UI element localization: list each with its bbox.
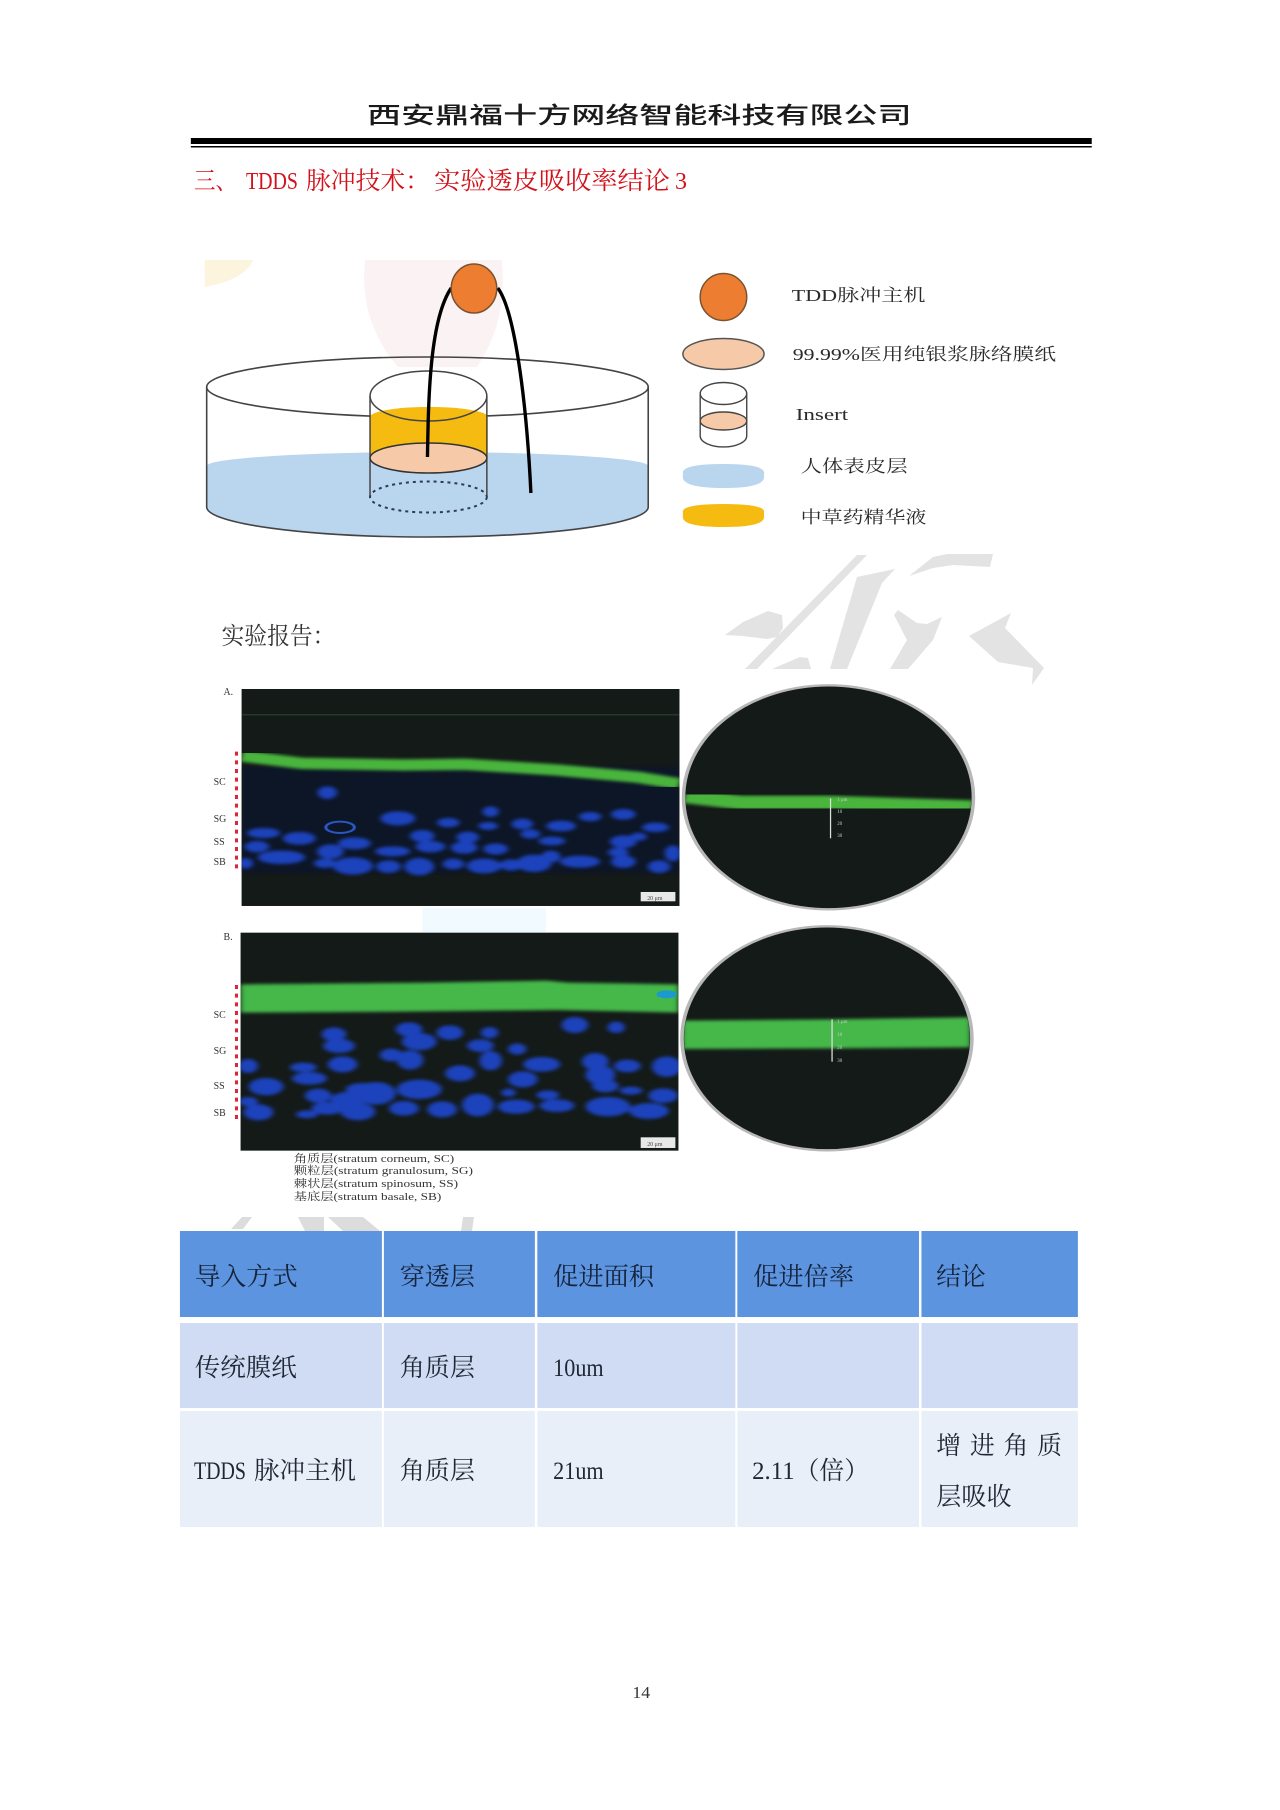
watermark: above table [231,1217,474,1231]
micrograph A: labels: SB [214,857,226,868]
legend: epidermis: 人体表皮层 [801,457,908,476]
micrograph A [214,685,973,909]
micrograph B: circular magnified view: 1 μm [837,1020,848,1025]
page number: 14 [632,1683,651,1702]
micrograph B: labels: SC [214,1010,226,1021]
wires [427,288,531,493]
micrograph A: labels: SG [214,814,226,825]
legend: herbal essence: 中草药精华液 [801,508,927,527]
table row: TDDS pulse unit: 2.11（倍） [752,1457,869,1485]
micrograph B: labels: B. [224,932,233,943]
section heading: 实验透皮吸收率结论 [434,167,670,195]
table row: traditional membrane: 角质层 [400,1354,475,1382]
membrane paper [370,443,487,473]
micrograph caption: 颗粒层(stratum granulosum, SG) [294,1163,473,1177]
header double rule [191,138,1092,148]
legend [683,274,1056,527]
micrograph caption: 棘状层(stratum spinosum, SS) [294,1176,459,1190]
micrograph A: circular magnified view: 20 [837,822,843,827]
micrograph A: labels: SC [214,777,226,788]
micrograph B: labels: 20 μm [647,1142,663,1148]
micrograph B [214,926,972,1151]
legend: membrane paper [683,338,1056,370]
micrograph A: labels: A. [224,687,233,698]
section heading: TDDS [246,168,298,195]
section heading: 3 [675,168,687,195]
report label: 实验报告： [222,623,335,650]
page content [180,96,1092,1702]
legend: pulse unit: TDD脉冲主机 [792,286,926,305]
insert dashed base [370,482,487,512]
dish outline [207,357,648,537]
pulse unit ball [451,264,497,313]
micrograph caption: 角质层(stratum corneum, SC) [294,1151,455,1165]
micrograph caption: 基底层(stratum basale, SB) [294,1189,442,1203]
table header row [180,1231,1078,1317]
watermark: upper right [725,554,1044,685]
insert cylinder [370,371,487,497]
table row: traditional membrane: 传统膜纸 [195,1354,297,1382]
table header row: 穿透层 [400,1263,475,1291]
micrograph B: circular magnified view [682,926,972,1150]
micrograph A: circular magnified view: 10 [837,810,843,815]
diagram: experiment apparatus [205,260,648,537]
micrograph B: circular magnified view: 10 [837,1033,843,1038]
micrograph A: labels: 20 μm [647,896,663,902]
comparison table [180,1231,1078,1527]
faint blue background patch [422,908,546,932]
table row: traditional membrane [180,1323,1078,1408]
micrograph B: labels [214,932,663,1148]
micrograph A: circular magnified view: 1 μm [837,798,848,803]
table row: TDDS pulse unit [180,1411,1078,1527]
micrograph B: labels: SB [214,1108,226,1119]
company title: 西安鼎福十方网络智能科技有限公司 [367,96,912,130]
section heading: 脉冲技术： [306,167,430,195]
section heading: 三、 [194,168,237,195]
micrograph B: rectangle image [236,933,679,1151]
micrograph B: circular magnified view: 30 [837,1059,843,1064]
micrograph B: labels: SS [214,1081,225,1092]
table row: TDDS pulse unit: 21um [553,1458,604,1485]
table row: TDDS pulse unit: 脉冲主机 [254,1457,356,1485]
legend: epidermis [683,457,908,488]
legend: insert [700,382,849,447]
faint background shapes [205,260,503,367]
insert: essence liquid [370,407,488,458]
micrograph A: labels [214,687,663,902]
micrograph B: circular magnified view: 20 [837,1046,843,1051]
micrograph A: circular magnified view [684,685,973,909]
table row: TDDS pulse unit: TDDS [194,1458,246,1485]
table row: TDDS pulse unit: 角质层 [400,1457,475,1485]
micrograph A: labels: SS [214,837,225,848]
micrograph A: rectangle image [236,689,679,906]
table row: TDDS pulse unit: 增进角质 [936,1432,1062,1460]
legend: herbal essence [683,504,927,527]
table header row: 促进倍率 [753,1263,854,1291]
micrograph B: labels: SG [214,1046,226,1057]
table header row: 导入方式 [195,1263,298,1291]
dish water [207,452,648,537]
legend: insert: Insert [796,405,849,424]
micrograph caption [294,1151,473,1203]
table header row: 结论 [936,1263,986,1291]
table row: traditional membrane: 10um [553,1355,604,1382]
legend: pulse unit [700,274,926,320]
micrograph A: circular magnified view: 30 [837,834,843,839]
legend: membrane paper: 99.99%医用纯银浆脉络膜纸 [793,345,1056,364]
table row: TDDS pulse unit: 层吸收 [936,1483,1012,1511]
section heading [194,167,687,195]
table header row: 促进面积 [553,1263,655,1291]
